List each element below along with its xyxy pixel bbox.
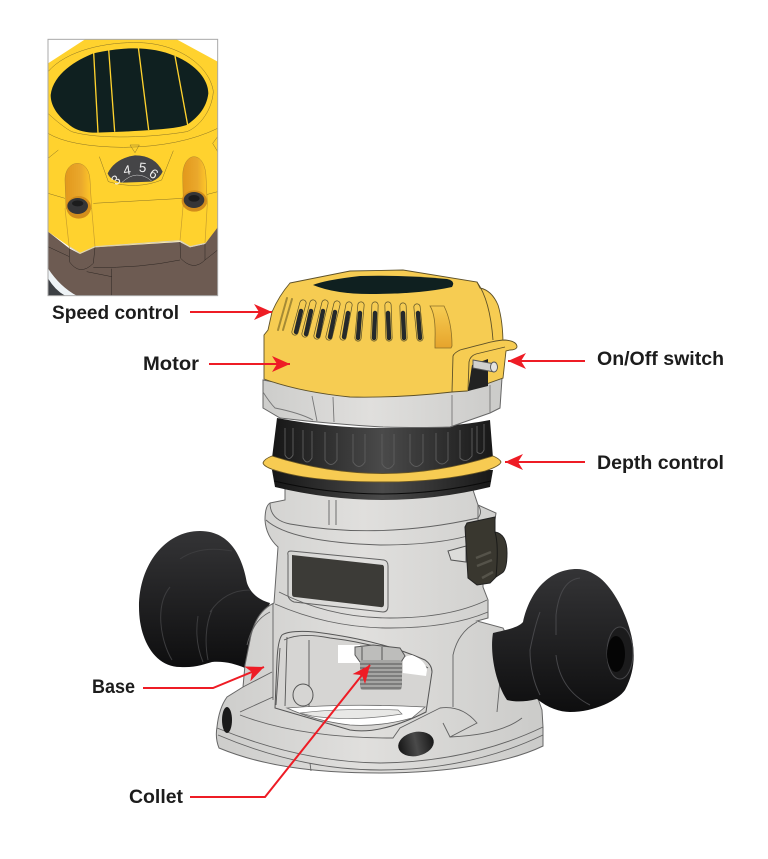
vent slots [278, 298, 420, 338]
inset: speed control close-up [48, 39, 218, 296]
arrow: motor [209, 363, 290, 365]
collet nut and threads [355, 645, 405, 690]
base front hole [396, 729, 436, 759]
label: Motor: Motor [143, 354, 200, 375]
white openings [338, 645, 360, 663]
yellow flange [263, 456, 501, 482]
inset: speed dial: 6 [146, 166, 161, 182]
inset: right adjustment slot [180, 157, 207, 243]
top opening [313, 276, 453, 294]
lower black ring [272, 470, 493, 500]
speed control slot on housing [430, 306, 452, 348]
inset: oval vent [51, 48, 208, 133]
body and base line work [217, 500, 543, 771]
arrow: base [143, 667, 264, 688]
label: Base [92, 667, 264, 698]
depth lever [448, 517, 507, 585]
inset: left adjustment slot [65, 163, 95, 248]
arrow: collet [190, 665, 370, 797]
arrow: depth control [505, 461, 585, 463]
arrow: on/off switch [508, 360, 585, 362]
side display window [288, 551, 388, 612]
depth control ring [263, 418, 501, 482]
gray motor collar [263, 378, 502, 428]
window opening [275, 631, 432, 731]
body and base casting [216, 488, 543, 773]
yellow motor housing [264, 270, 517, 397]
switch guard [452, 340, 517, 392]
label: Depth control: Depth control [597, 453, 724, 474]
inset: speed dial [108, 155, 163, 188]
base left hole [222, 707, 232, 733]
small round plug [293, 684, 313, 706]
on/off switch pin [473, 360, 495, 372]
router illustration [139, 270, 634, 773]
inset: speed dial: 5 [138, 160, 147, 175]
inset: yellow housing [48, 39, 218, 254]
label: Base: Base [92, 677, 135, 698]
label: Speed control: Speed control [52, 303, 179, 324]
label: Collet: Collet [129, 787, 184, 808]
label: On/Off switch: On/Off switch [597, 349, 724, 370]
inset: speed dial: 3 [108, 172, 124, 188]
right knob [492, 569, 634, 712]
inset: speed dial: 4 [122, 162, 132, 178]
arrow: speed control [190, 311, 272, 313]
label: Collet [129, 665, 370, 808]
left knob [139, 531, 270, 668]
inset: brown lower body [48, 227, 218, 296]
